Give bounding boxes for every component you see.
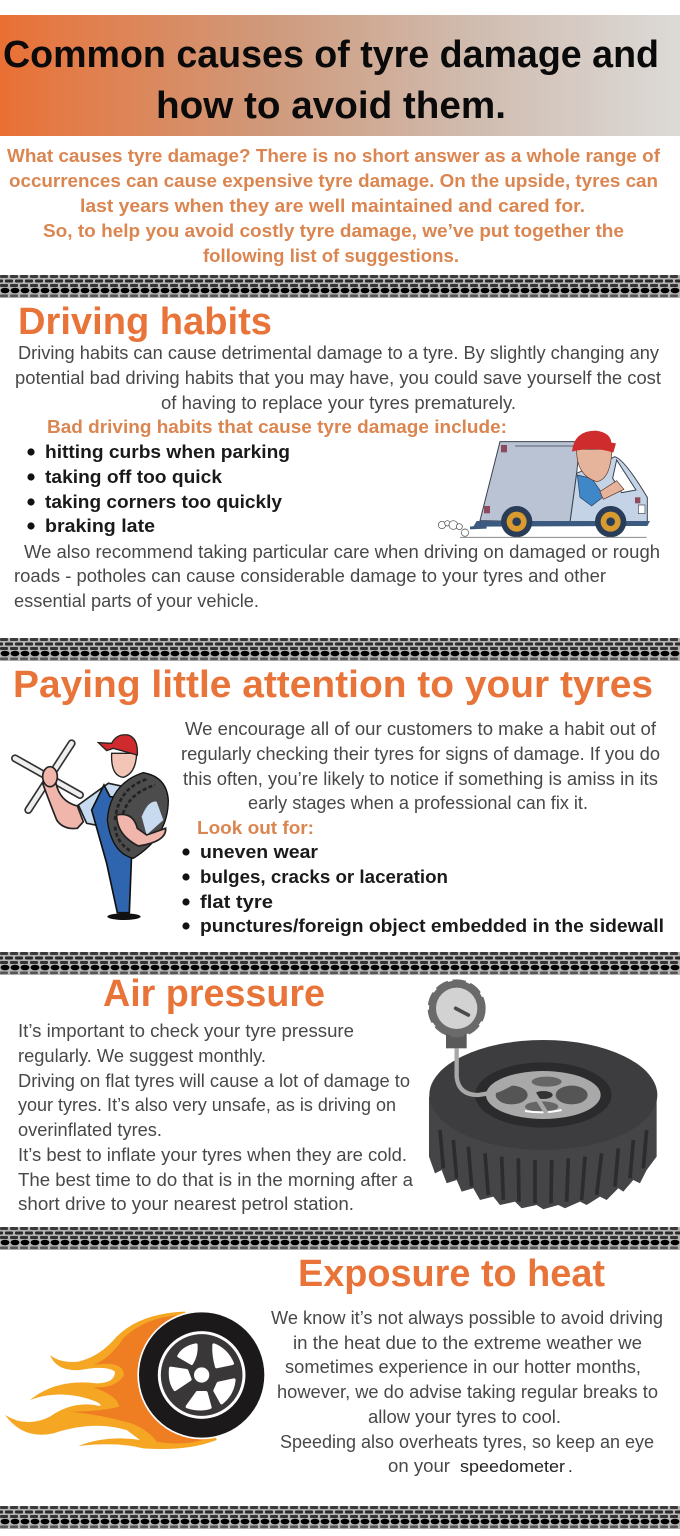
- list: signs to look out for: punctures/foreign object embedded in the sidewall: [200, 915, 664, 936]
- text: air pressure advice: regularly. We suggest monthly.: [18, 1045, 266, 1066]
- text: checking tyres: [181, 718, 660, 813]
- text: heat advice: on your: [388, 1455, 450, 1476]
- list: bad driving habits: hitting curbs when parking: [45, 441, 290, 462]
- panel: exposure to heat: [5, 1253, 663, 1476]
- text: driving habits intro: of having to replace your tyres prematurely.: [161, 392, 516, 413]
- text: heat advice: Speeding also overheats tyres, so keep an eye: [280, 1431, 654, 1452]
- panel: driving habits: [14, 301, 661, 611]
- text: air pressure advice: It’s best to inflate your tyres when they are cold.: [18, 1144, 407, 1165]
- text: checking tyres: this often, you’re likely to notice if something is amiss in its: [183, 768, 658, 789]
- text: rough roads advice: essential parts of your vehicle.: [14, 590, 259, 611]
- heading: exposure to heat: Exposure to heat: [298, 1253, 605, 1295]
- heading: driving habits: Driving habits: [18, 301, 272, 343]
- heading: air pressure: Air pressure: [103, 973, 325, 1015]
- text: checking tyres: early stages when a professional can fix it.: [248, 792, 588, 813]
- text: air pressure advice: Driving on flat tyres will cause a lot of damage to: [18, 1070, 410, 1091]
- subheading: look out for: Look out for:: [197, 817, 314, 838]
- list: signs to look out for: flat tyre: [200, 891, 273, 912]
- list: signs to look out for: uneven wear: [200, 841, 318, 862]
- title banner: Common causes of tyre damage and: [3, 34, 659, 76]
- subheading: bad driving habits: Bad driving habits that cause tyre damage include:: [47, 416, 507, 437]
- tread divider 2: [0, 638, 680, 661]
- text: heat advice: sometimes experience in our hotter months,: [285, 1356, 641, 1377]
- heading: paying little attention: Paying little attention to your tyres: [13, 664, 653, 706]
- text: rough roads advice: [14, 541, 660, 611]
- text: heat advice: .: [568, 1457, 573, 1476]
- icon: tyre with pressure gauge: [429, 981, 657, 1209]
- text: air pressure advice: short drive to your nearest petrol station.: [18, 1193, 354, 1214]
- text: heat advice: allow your tyres to cool.: [368, 1406, 561, 1427]
- text: driving habits intro: potential bad driving habits that you may have, you could save yourself the cost: [15, 367, 661, 388]
- text: rough roads advice: roads - potholes can cause considerable damage to your tyres and other: [14, 565, 606, 586]
- text: driving habits intro: [15, 342, 661, 413]
- panel: air pressure: [18, 973, 657, 1214]
- title banner: [0, 15, 680, 136]
- text: heat advice: [271, 1307, 663, 1476]
- text: checking tyres: regularly checking their tyres for signs of damage. If you do: [181, 743, 660, 764]
- text: heat advice: We know it’s not always possible to avoid driving: [271, 1307, 663, 1328]
- list: signs to look out for: bulges, cracks or laceration: [200, 866, 448, 887]
- text: heat advice: speedometer: [460, 1457, 565, 1476]
- tread divider 1: [0, 275, 680, 298]
- introduction text: What causes tyre damage? There is no short answer as a whole range of: [7, 145, 661, 166]
- text: checking tyres: We encourage all of our customers to make a habit out of: [185, 718, 657, 739]
- list: bad driving habits: taking off too quick: [45, 466, 223, 487]
- introduction text: last years when they are well maintained and cared for.: [80, 195, 585, 216]
- icon: mechanic with wrench and tyre: [15, 735, 168, 920]
- text: air pressure advice: The best time to do that is in the morning after a: [18, 1169, 414, 1190]
- text: air pressure advice: It’s important to check your tyre pressure: [18, 1020, 354, 1041]
- tread divider 3: [0, 952, 680, 975]
- icon: flaming wheel: [5, 1311, 266, 1449]
- introduction text: following list of suggestions.: [203, 245, 459, 266]
- icon: delivery van with driver: [438, 431, 650, 537]
- text: air pressure advice: [18, 1020, 414, 1214]
- introduction text: occurrences can cause expensive tyre damage. On the upside, tyres can: [9, 170, 658, 191]
- introduction text: [7, 145, 661, 266]
- tread divider 4: [0, 1227, 680, 1250]
- list: signs to look out for: [182, 841, 664, 936]
- text: air pressure advice: overinflated tyres.: [18, 1119, 162, 1140]
- list: bad driving habits: [27, 441, 290, 536]
- text: rough roads advice: We also recommend taking particular care when driving on damaged or rough: [24, 541, 660, 562]
- tread divider 5: [0, 1506, 680, 1529]
- text: heat advice: in the heat due to the extreme weather we: [293, 1332, 642, 1353]
- introduction text: So, to help you avoid costly tyre damage, we’ve put together the: [43, 220, 624, 241]
- list: bad driving habits: taking corners too quickly: [45, 491, 283, 512]
- text: driving habits intro: Driving habits can cause detrimental damage to a tyre. By slightly changing any: [18, 342, 660, 363]
- text: heat advice: however, we do advise taking regular breaks to: [277, 1381, 658, 1402]
- text: air pressure advice: your tyres. It’s also very unsafe, as is driving on: [18, 1094, 396, 1115]
- title banner: how to avoid them.: [156, 85, 506, 127]
- panel: paying little attention: [13, 664, 664, 936]
- list: bad driving habits: braking late: [45, 515, 155, 536]
